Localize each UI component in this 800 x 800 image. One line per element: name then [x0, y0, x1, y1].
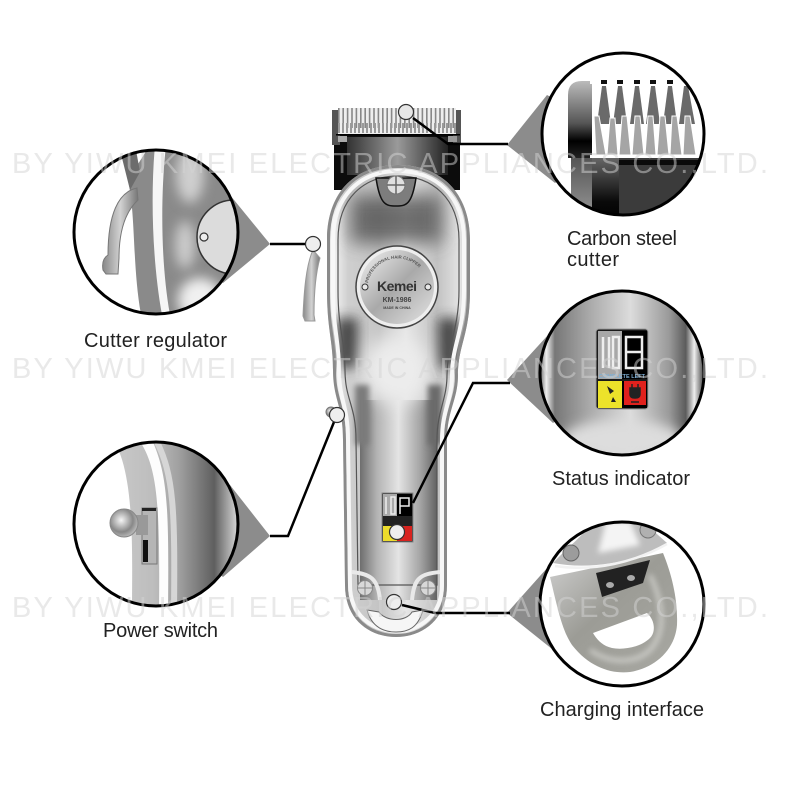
clipper body: [320, 160, 476, 640]
label: cutter regulator: Cutter regulator: [84, 330, 227, 352]
regulator screw ring: [200, 233, 208, 241]
label: carbon steel cutter: cutter: [567, 249, 619, 271]
LCD caption: COMPLETE LEFT: [599, 374, 646, 380]
callout triangle: status indicator: [507, 335, 622, 423]
detail circle: carbon steel cutter: [540, 50, 710, 220]
callout triangle: charging interface: [507, 567, 622, 653]
charging hook: [367, 610, 423, 632]
leader line: charging interface: [402, 605, 510, 613]
detail circle: status indicator: [538, 288, 706, 460]
leader line: cutter regulator: [270, 243, 306, 245]
marker dot: charging interface: [386, 594, 402, 610]
marker dot: power switch: [330, 408, 344, 422]
watermark lines: [12, 148, 768, 624]
zoomed lever: [103, 188, 138, 274]
long teeth: [597, 86, 695, 124]
watermark lines: BY YIWU KMEI ELECTRIC APPLIANCES CO.,LTD.: [12, 353, 768, 385]
detail circle: power switch: [72, 439, 242, 612]
power switch knob: [326, 407, 336, 417]
label: status indicator: Status indicator: [552, 468, 690, 490]
charging contacts: [596, 560, 650, 597]
LCD panel: [596, 329, 648, 409]
clipper mini display: [382, 493, 413, 542]
badge origin: MADE IN CHINA: [383, 306, 411, 310]
callout triangle: power switch: [156, 485, 270, 577]
badge brand name: Kemei: [377, 278, 417, 294]
short comb teeth: [594, 116, 696, 155]
leader line: power switch: [270, 422, 334, 536]
clipper blade head: [332, 108, 461, 190]
cutter regulator lever: [303, 250, 320, 321]
metal loop: [550, 553, 677, 672]
label: carbon steel cutter: Carbon steel: [567, 228, 677, 250]
neck and plate: [553, 519, 667, 566]
top screw mount: [376, 176, 416, 206]
brand badge: [355, 245, 439, 329]
switch knob ball: [110, 509, 138, 537]
detail circle: charging interface: [538, 519, 708, 690]
watermark lines: BY YIWU KMEI ELECTRIC APPLIANCES CO.,LTD.: [12, 592, 768, 624]
label: charging interface: Charging interface: [540, 699, 704, 721]
marker dot: cutter regulator: [306, 236, 320, 252]
marker dot: status indicator: [390, 524, 404, 540]
leader line: carbon steel cutter: [413, 118, 508, 144]
label: power switch: Power switch: [103, 620, 218, 642]
leader line: status indicator: [413, 383, 510, 503]
watermark lines: BY YIWU KMEI ELECTRIC APPLIANCES CO.,LTD.: [12, 148, 768, 180]
marker dot: carbon steel cutter: [398, 104, 414, 120]
badge model: KM-1986: [383, 297, 411, 304]
base screws and plate: [352, 572, 440, 600]
callout triangle: cutter regulator: [156, 195, 270, 283]
badge text ring: PROFESSIONAL HAIR CLIPPER: [365, 256, 421, 283]
product: hair clipper: [302, 108, 470, 637]
detail circle: cutter regulator: [72, 148, 240, 316]
callout triangle: carbon steel cutter: [507, 95, 623, 183]
